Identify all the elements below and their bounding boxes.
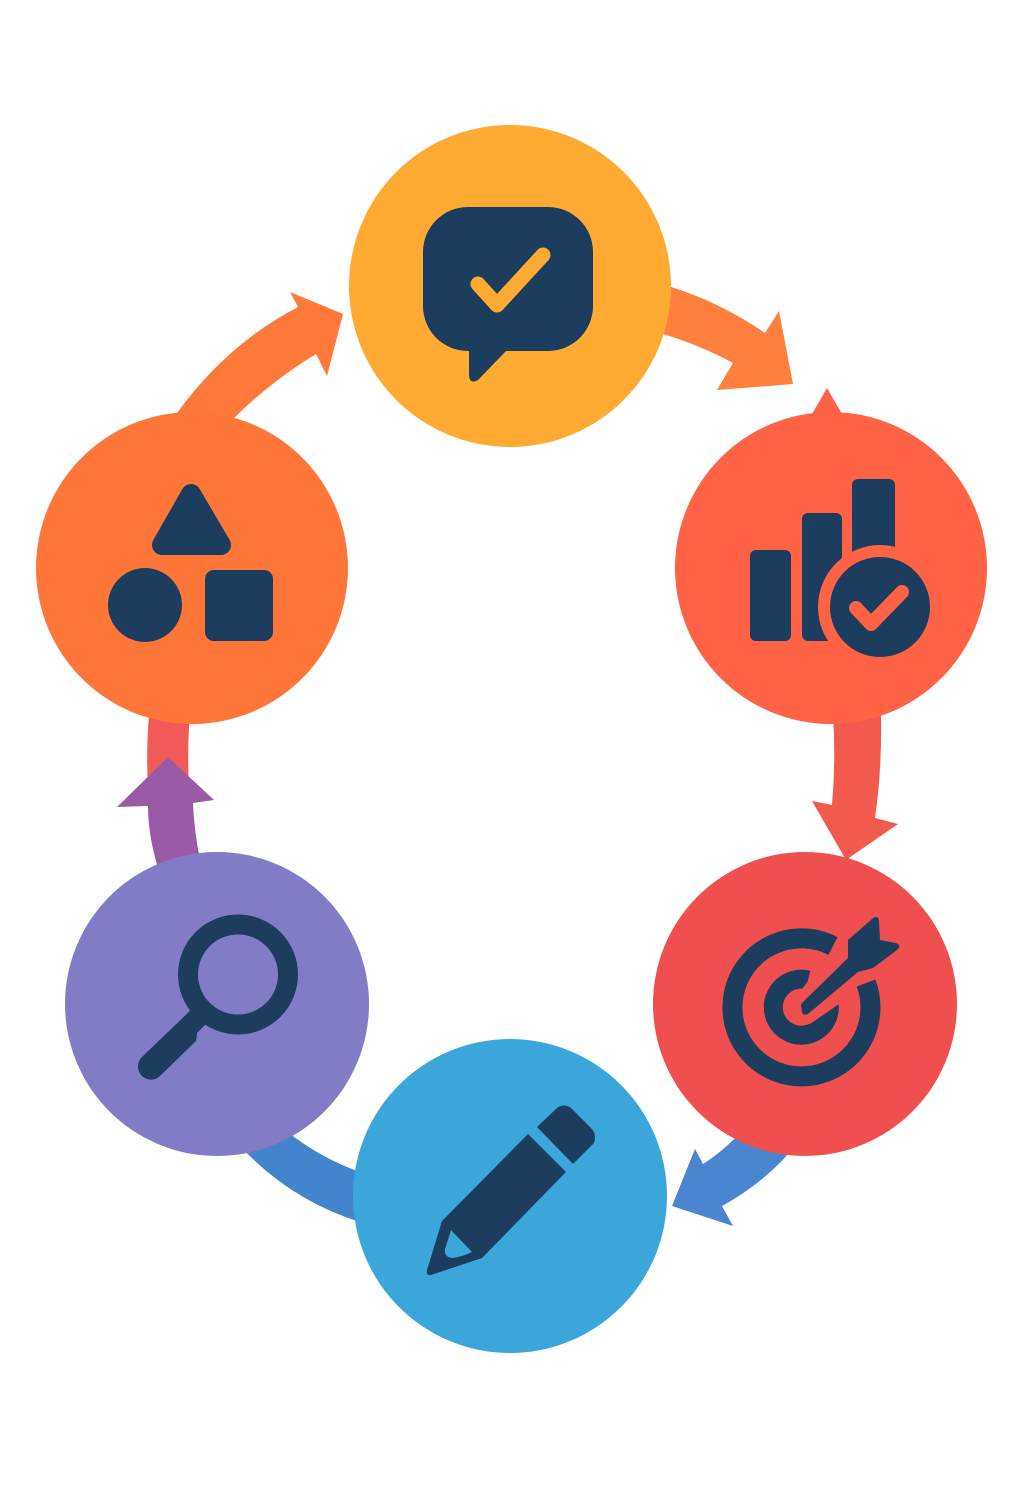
step: research (purple) [65,852,369,1156]
icon: shapes [108,494,273,642]
icon: chat bubble with check [423,207,593,382]
icon: pencil [427,1106,595,1275]
arrow: blue to purple [240,1130,360,1222]
step: feedback (yellow) [349,125,671,447]
icon: magnifying glass [138,924,288,1080]
step: results (red-orange) [675,412,987,724]
step: target (red) [653,852,957,1156]
icon: bar chart with check [750,479,942,669]
icon: target with arrow [732,917,899,1076]
arrow: red to blue [672,1135,790,1226]
arrow: red-orange to red [812,388,898,860]
arrow: purple to orange [117,715,214,868]
arrow: yellow to red-orange [660,286,793,390]
step: write (blue) [353,1039,667,1353]
arrow: orange to yellow [175,292,343,420]
step: ideate (orange) [36,412,348,724]
